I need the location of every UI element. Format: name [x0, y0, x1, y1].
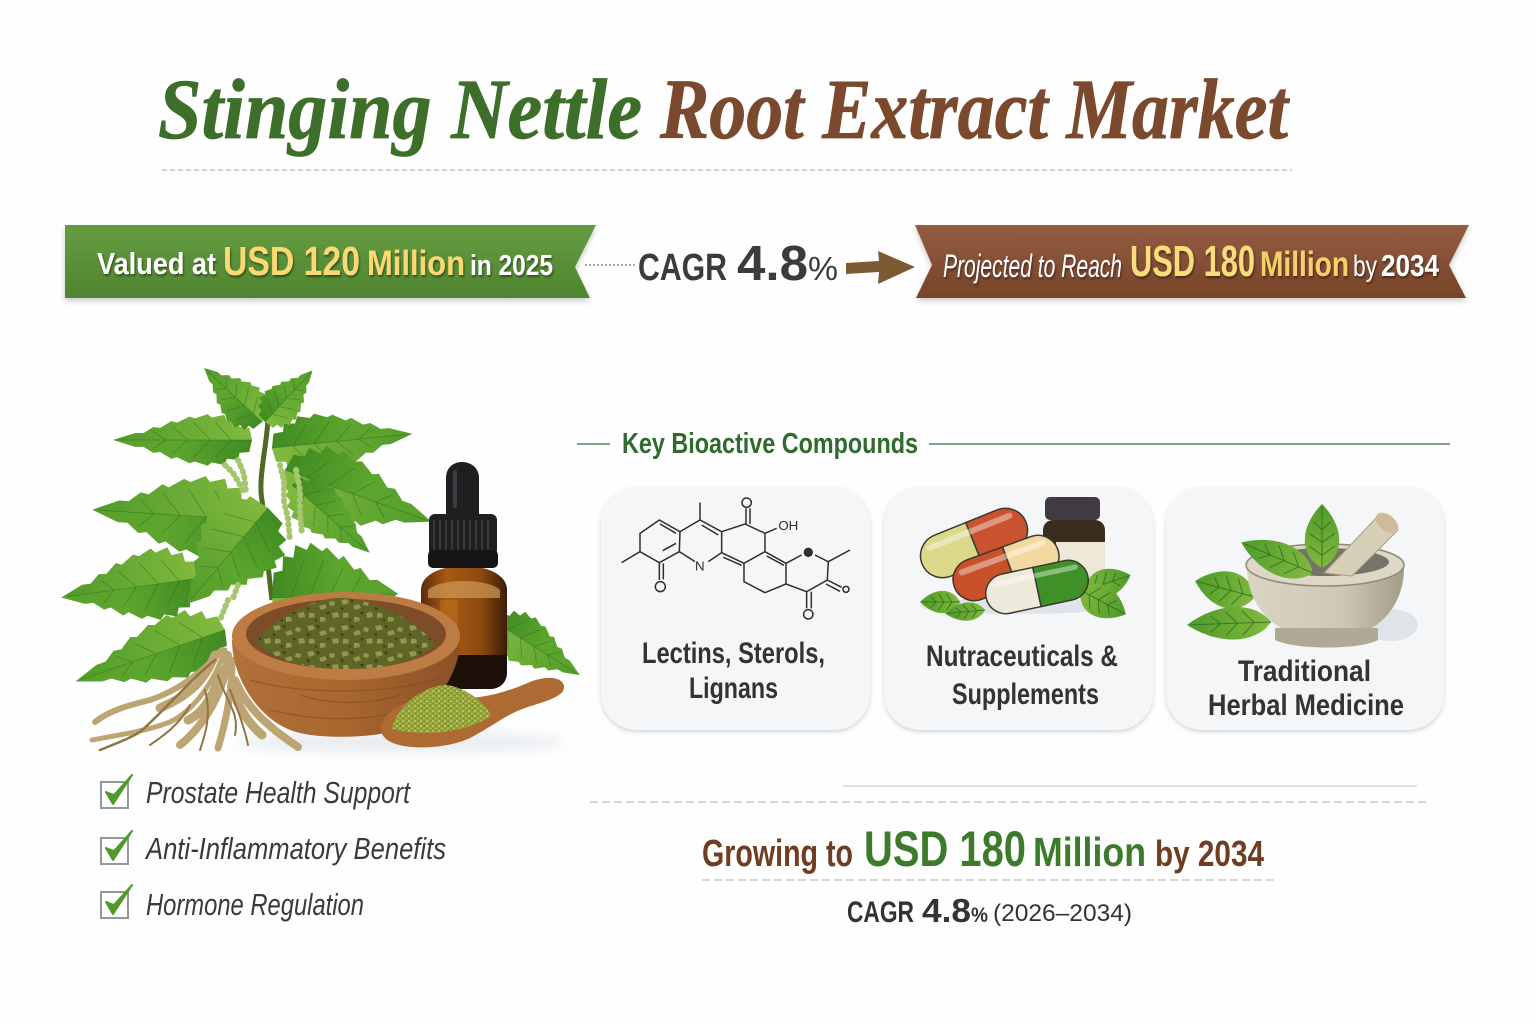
panel: nutraceuticals and supplements — [884, 487, 1153, 730]
banner: valued at: in 2025 — [470, 250, 553, 282]
banner: valued at: Million — [367, 244, 465, 283]
label: traditional: Traditional — [1238, 655, 1371, 688]
icon: dropper bottle — [421, 462, 507, 689]
title — [158, 61, 1291, 157]
callout: growing to usd 180 million: Million — [1033, 829, 1146, 875]
callout: cagr 4.8% (2026-2034): CAGR — [847, 896, 914, 929]
title: Stinging Nettle — [158, 61, 642, 157]
banner: valued at — [65, 225, 596, 298]
icon: molecule — [622, 498, 850, 619]
banner: projected: by — [1353, 250, 1377, 283]
icon: mortar and pestle — [1186, 504, 1418, 648]
checklist — [101, 775, 446, 922]
label: traditional: Herbal Medicine — [1208, 689, 1404, 722]
title: Root Extract Market — [659, 61, 1291, 157]
label: traditional — [1208, 655, 1404, 722]
item: anti-inflammatory benefits: Anti-Inflammatory Benefits — [144, 831, 446, 866]
icon: roots — [92, 650, 298, 750]
callout: cagr 4.8% (2026-2034): (2026–2034) — [993, 900, 1132, 927]
cagr connector: 4.8 — [737, 237, 808, 291]
icon: wooden bowl — [232, 592, 460, 737]
label: lectins: Lectins, Sterols, — [642, 637, 825, 670]
banner: projected: USD 180 — [1130, 237, 1255, 286]
panel: lectins, sterols, lignans — [601, 487, 870, 730]
label: nutraceuticals: Nutraceuticals & — [926, 640, 1118, 673]
cagr connector: % — [808, 250, 838, 287]
icon: capsules and bottle — [914, 497, 1135, 629]
item: hormone regulation: Hormone Regulation — [146, 887, 364, 922]
heading: key bioactive compounds: Key Bioactive Compounds — [622, 428, 918, 460]
label: lectins — [642, 637, 825, 705]
banner: projected: 2034 — [1381, 248, 1440, 283]
cagr connector — [585, 237, 838, 291]
illustration: nettle plant, bowl, bottle, spoon — [56, 351, 593, 752]
cagr connector: CAGR — [638, 247, 727, 289]
callout: cagr 4.8% (2026-2034): 4.8 — [922, 892, 971, 929]
callout: growing to usd 180 million — [702, 821, 1264, 877]
label: lectins: Lignans — [689, 672, 778, 705]
icon: wooden spoon with powder — [381, 678, 564, 747]
icon: molecule: OH — [778, 518, 798, 533]
callout: cagr 4.8% (2026-2034) — [847, 892, 1132, 929]
callout: cagr 4.8% (2026-2034): % — [971, 904, 988, 927]
panel: traditional herbal medicine — [1166, 487, 1444, 730]
icon: nettle plant — [56, 351, 593, 713]
banner: projected: Million — [1260, 245, 1349, 284]
banner: projected: Projected to Reach — [943, 248, 1122, 284]
item: hormone regulation — [101, 885, 364, 922]
banner: projected — [915, 225, 1469, 298]
icon: molecule: N — [695, 559, 705, 574]
callout: growing to usd 180 million: by 2034 — [1155, 833, 1264, 874]
label: nutraceuticals — [926, 640, 1118, 711]
callout: growing to usd 180 million: Growing to — [702, 833, 853, 875]
arrow — [846, 251, 915, 284]
banner: valued at: Valued at — [97, 246, 216, 281]
callout: growing to usd 180 million: USD 180 — [864, 821, 1026, 877]
item: prostate health support: Prostate Health Support — [146, 775, 411, 810]
banner: valued at: USD 120 — [223, 238, 360, 284]
label: nutraceuticals: Supplements — [952, 678, 1099, 711]
